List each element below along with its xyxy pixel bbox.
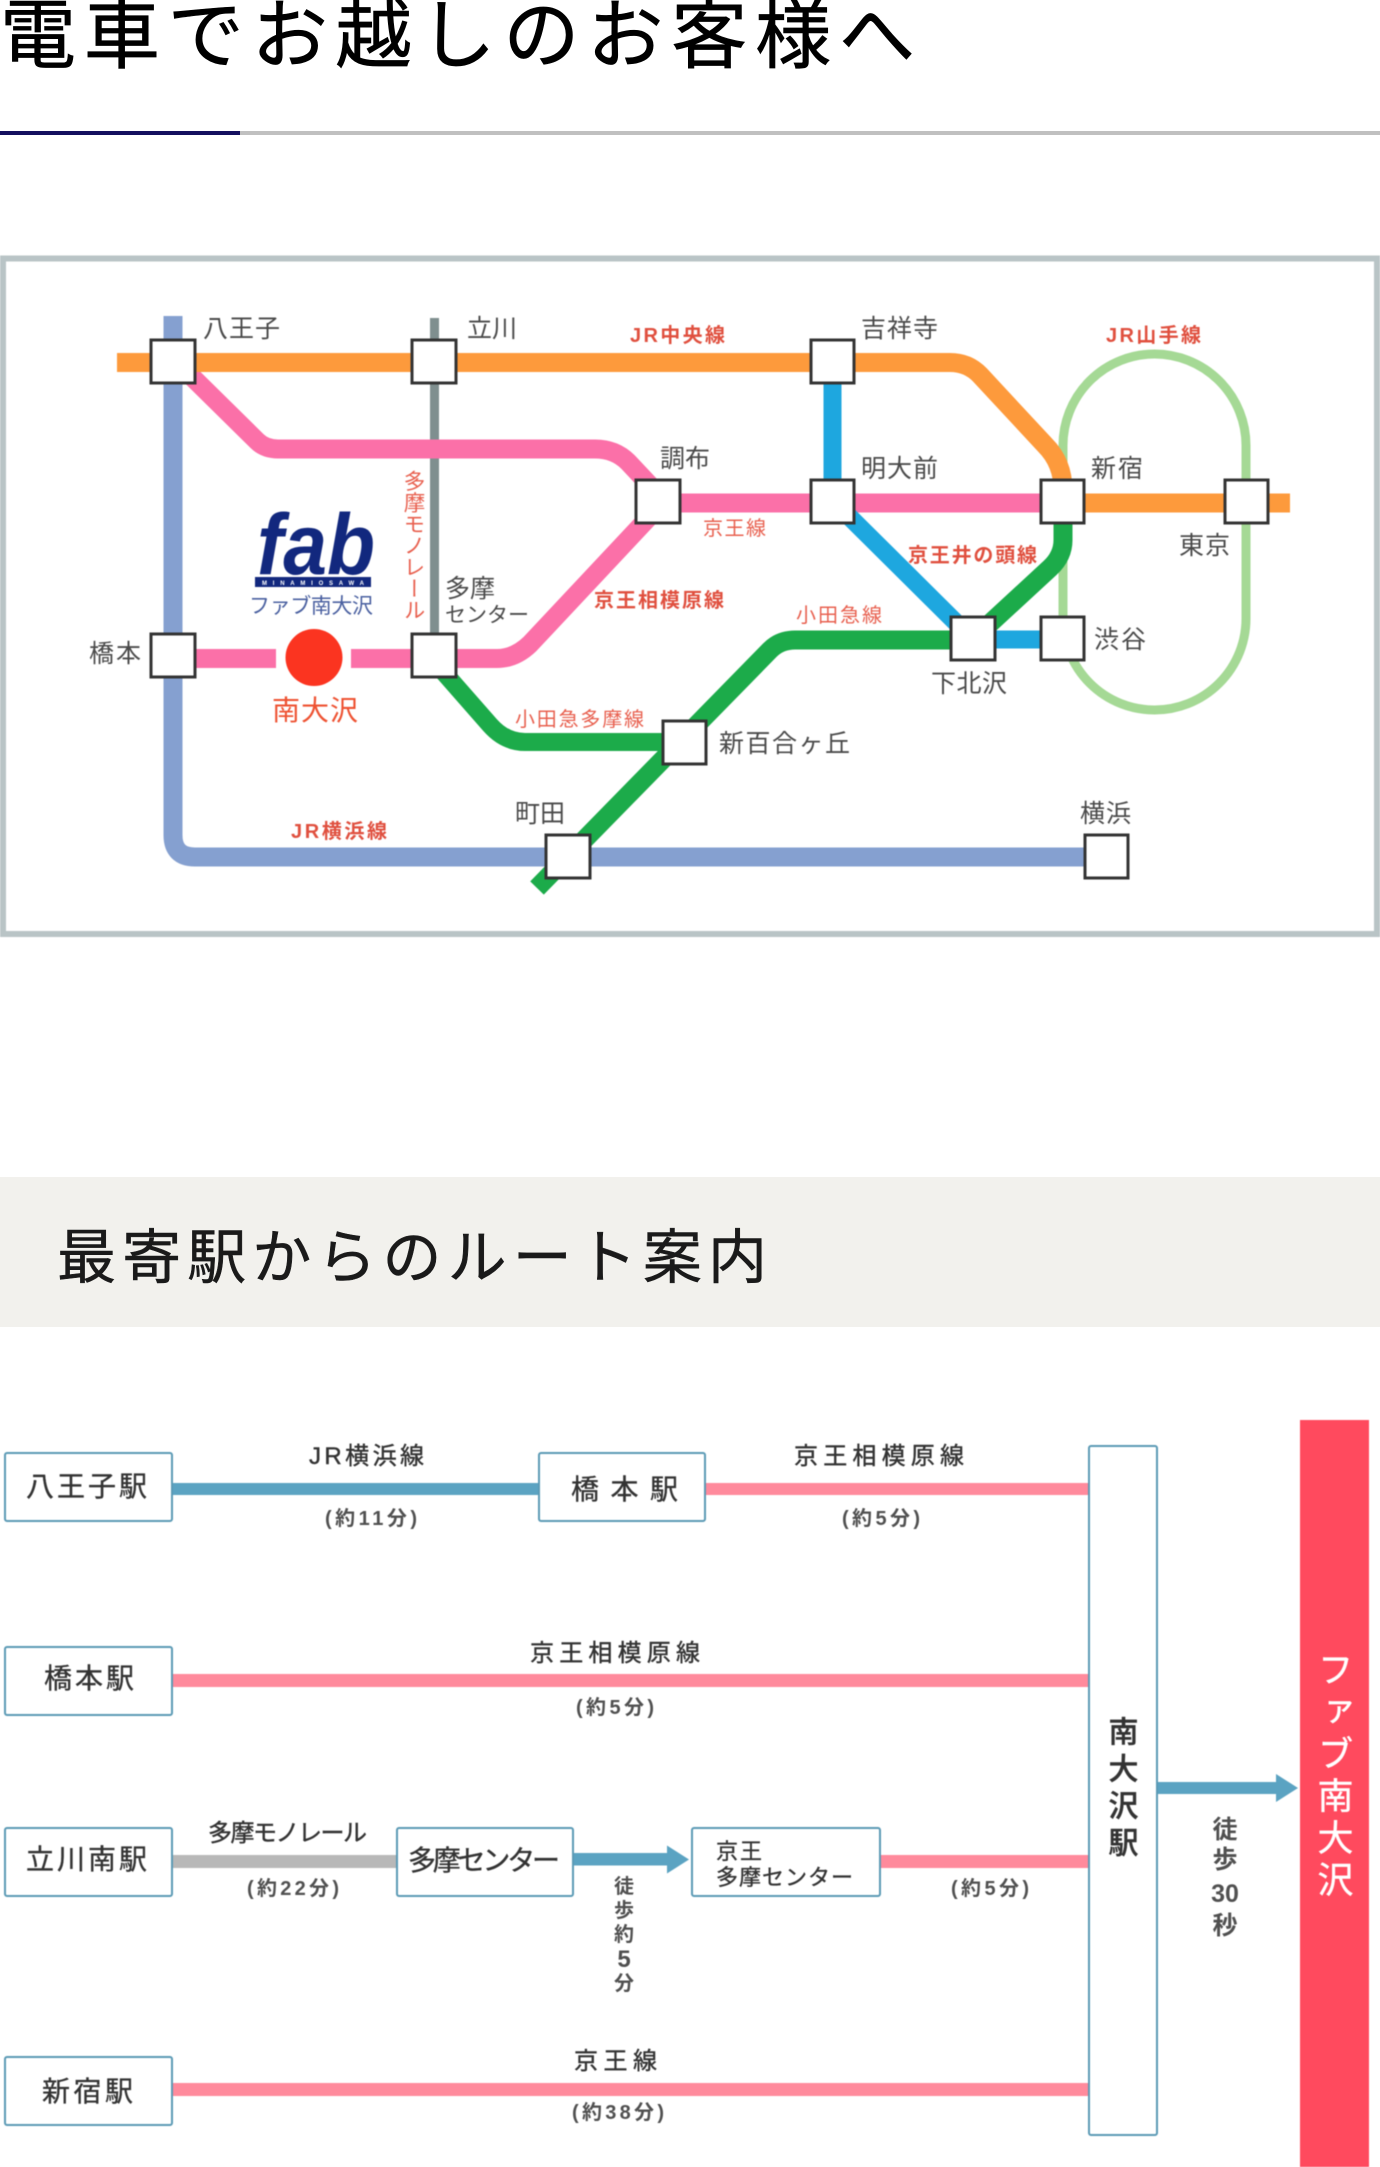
railway line labels: 京王線: [703, 517, 766, 540]
route diagram: [5, 1420, 1369, 2167]
route labels: (約5分): [951, 1877, 1029, 1900]
box: Hashimoto row 2: 橋本駅: [44, 1663, 134, 1694]
route labels: (約11分): [325, 1507, 417, 1530]
route labels: (約5分): [842, 1507, 920, 1530]
box: Keio Tama Center: 京王: [716, 1839, 762, 1864]
station labels: 橋本: [89, 640, 141, 668]
box: Tachikawa-minami: 立川南駅: [26, 1844, 147, 1875]
label: walk about 5 minutes: [614, 1875, 634, 1995]
route labels: (約5分): [576, 1696, 654, 1719]
box: Tama Center: [397, 1828, 573, 1896]
connector lines: [172, 1483, 1089, 2096]
station boxes: [151, 340, 1268, 878]
line: Keio Sagamihara west: [190, 649, 276, 668]
railway line labels: 京王相模原線: [594, 589, 724, 612]
railway line labels: JR中央線: [630, 324, 725, 347]
box: Hashimoto row 2: [5, 1647, 172, 1715]
railway line labels: JR山手線: [1106, 324, 1201, 347]
line: Odakyu: [537, 640, 955, 888]
label: walk about 5 minutes: 約: [614, 1923, 634, 1946]
box: Fab Minami-Osawa: ファブ南大沢: [1312, 1651, 1354, 1903]
label: walk 30 seconds: [1211, 1816, 1239, 1940]
route labels: 京王相模原線: [794, 1443, 964, 1470]
box: Tama Center: 多摩センター: [408, 1845, 560, 1876]
route labels: 多摩モノレール: [208, 1820, 367, 1847]
box: Shinjuku: [5, 2057, 172, 2125]
line: Shinjuku to Shimokitazawa: [985, 520, 1063, 628]
station labels: 八王子: [203, 315, 280, 343]
section heading: 最寄駅からのルート案内: [57, 1225, 767, 1291]
label: walk 30 seconds: 30: [1211, 1880, 1239, 1908]
line: JR Chuo to Tokyo: [1080, 494, 1290, 512]
arrow: walk to Fab: [1157, 1774, 1298, 1802]
label: walk about 5 minutes: 分: [614, 1972, 634, 1995]
station labels: 明大前: [861, 455, 938, 483]
box: Shinjuku: 新宿駅: [42, 2076, 133, 2107]
label: walk about 5 minutes: 歩: [614, 1899, 634, 1922]
station labels: 新百合ヶ丘: [719, 730, 850, 758]
route labels: JR横浜線: [309, 1443, 424, 1470]
box: Keio Tama Center: 多摩センター: [716, 1865, 853, 1890]
railway line labels: 多摩モノレール: [401, 470, 425, 620]
station labels: 吉祥寺: [861, 315, 938, 343]
line: Keio Inokashira: [832, 380, 1050, 640]
box: Keio Tama Center: [692, 1828, 880, 1896]
railway line labels: 小田急線: [796, 604, 882, 627]
box: Fab Minami-Osawa: [1300, 1420, 1369, 2167]
logo: fab: MINAMIOSAWA: [262, 581, 365, 587]
station labels: 立川: [467, 315, 517, 343]
line: Odakyu Tama: [440, 668, 670, 742]
arrow: walk to Keio Tama Center: [573, 1846, 689, 1874]
railway line labels: 小田急多摩線: [515, 708, 644, 731]
station labels: 下北沢: [931, 670, 1007, 698]
box: Tachikawa-minami: [5, 1828, 172, 1896]
line: JR Yokohama: [173, 316, 1090, 857]
section heading band: [0, 1177, 1380, 1327]
panel: railway route map: [3, 258, 1377, 934]
railway line labels: 京王井の頭線: [908, 544, 1037, 567]
label: walk about 5 minutes: 5: [617, 1946, 631, 1973]
railway line labels: JR横浜線: [291, 820, 387, 843]
label: walk about 5 minutes: 徒: [614, 1875, 634, 1898]
box: Minami-Osawa station: [1089, 1446, 1157, 2135]
logo caption: ファブ南大沢: [249, 595, 373, 618]
label: Minami-Osawa: 南大沢: [272, 695, 358, 726]
station labels: [89, 315, 1230, 828]
box: Hashimoto: [539, 1453, 705, 1521]
line: Tama Monorail: [430, 318, 439, 640]
station labels: 新宿: [1091, 455, 1143, 483]
box: Minami-Osawa station: 南大沢駅: [1104, 1716, 1138, 1864]
line: JR Chuo: [117, 362, 1063, 490]
label: walk 30 seconds: 秒: [1212, 1912, 1238, 1940]
box: Hachioji: 八王子駅: [26, 1471, 147, 1502]
box: Hashimoto: 橋本駅: [571, 1474, 678, 1505]
station labels: 町田: [515, 800, 565, 828]
route labels: [208, 1443, 1029, 2124]
route labels: (約38分): [572, 2101, 664, 2124]
box: Hachioji: [5, 1453, 172, 1521]
station labels: 東京: [1179, 532, 1230, 560]
station marker: Minami-Osawa: [286, 629, 342, 686]
station labels: 渋谷: [1094, 626, 1146, 654]
logo: fab: fab: [257, 497, 375, 593]
route labels: (約22分): [247, 1877, 339, 1900]
station labels: 多摩: [445, 575, 495, 603]
line: Keio Sagamihara east: [351, 516, 650, 658]
label: walk 30 seconds: 歩: [1212, 1846, 1238, 1874]
line: Keio: [185, 370, 1050, 503]
station labels: 調布: [660, 445, 710, 473]
line: JR Yamanote loop: [1063, 354, 1246, 710]
station labels: センター: [445, 604, 529, 627]
station labels: 横浜: [1080, 800, 1131, 828]
label: walk 30 seconds: 徒: [1212, 1816, 1238, 1844]
route labels: 京王線: [574, 2048, 657, 2075]
title underline: [0, 131, 1380, 135]
railway line labels: [291, 324, 1201, 843]
route labels: 京王相模原線: [530, 1640, 700, 1667]
